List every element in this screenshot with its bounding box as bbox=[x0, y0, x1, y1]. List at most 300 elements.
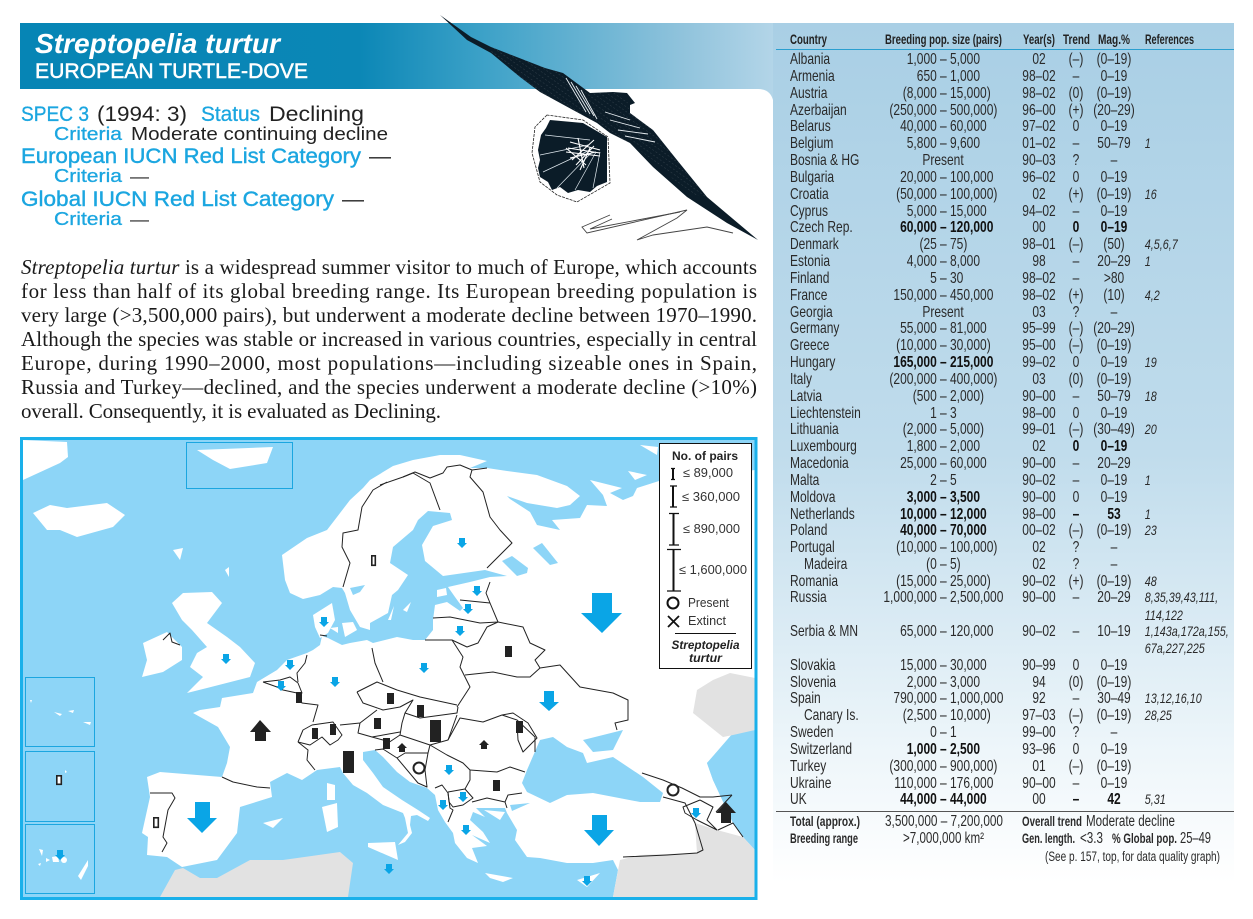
status block: (1994: 3) bbox=[97, 103, 187, 126]
panel: population table bbox=[773, 23, 1234, 883]
table column: breeding population size: 150,000 bbox=[893, 285, 937, 303]
table column: magnitude: 0–19 bbox=[1101, 487, 1128, 505]
table column: breeding population size: – 5 bbox=[940, 470, 957, 488]
status block: Criteria bbox=[54, 165, 123, 186]
table column: years: 96–00 bbox=[1022, 100, 1056, 118]
table column: breeding population size: (25 bbox=[919, 234, 937, 252]
table column: years: 02 bbox=[1032, 49, 1046, 67]
table column: breeding population size: – 3 bbox=[940, 403, 957, 421]
table column: breeding population size: 4,000 bbox=[907, 251, 937, 269]
status block: Criteria bbox=[54, 123, 123, 144]
table column: trend: – bbox=[1073, 789, 1080, 807]
table column: breeding population size bbox=[883, 49, 1004, 807]
table column: magnitude: 53 bbox=[1107, 504, 1121, 522]
table column: breeding population size: 25,000 bbox=[900, 453, 937, 471]
table column: magnitude: 50–79 bbox=[1097, 386, 1131, 404]
map: population bars, solid bbox=[296, 646, 523, 791]
table column: country: UK bbox=[790, 789, 807, 807]
body paragraph: Streptopelia turtur is a widespread summer visitor to much of Europe, which accounts bbox=[21, 255, 757, 279]
table column: breeding population size: – 120,000 bbox=[940, 217, 994, 235]
table column: breeding population size: 2 bbox=[930, 470, 937, 488]
table totals: Total (approx.) bbox=[790, 814, 860, 829]
map: seas and lakes bbox=[350, 543, 755, 850]
table column: trend: – bbox=[1073, 688, 1080, 706]
table column: country: Cyprus bbox=[790, 201, 828, 219]
table column: country: Latvia bbox=[790, 386, 822, 404]
table column: trend: 0 bbox=[1073, 352, 1080, 370]
table column: years: 92 bbox=[1032, 688, 1046, 706]
table column: breeding population size: 40,000 bbox=[900, 520, 937, 538]
table column: trend bbox=[1068, 49, 1084, 807]
table totals: Breeding range bbox=[790, 831, 858, 846]
table column: breeding population size: 44,000 bbox=[900, 789, 937, 807]
map legend: turtur bbox=[689, 651, 723, 665]
table column: magnitude: – bbox=[1111, 302, 1118, 320]
table column: trend: (–) bbox=[1069, 49, 1083, 67]
table column: years: 90–02 bbox=[1022, 571, 1056, 589]
table column: breeding population size: – 12,000 bbox=[940, 504, 987, 522]
table column: breeding population size: – 100,000) bbox=[940, 537, 997, 555]
table header: Year(s) bbox=[1023, 32, 1055, 47]
table column: breeding population size: (500 bbox=[913, 386, 937, 404]
table header bbox=[790, 32, 1194, 47]
table column: breeding population size: (10,000 bbox=[896, 537, 937, 555]
distribution map of Europe bbox=[21, 438, 756, 898]
table column: country: Turkey bbox=[790, 756, 826, 774]
table column: trend: 0 bbox=[1073, 655, 1080, 673]
table column: years: 98–02 bbox=[1022, 66, 1056, 84]
table column: references: 4,2 bbox=[1145, 288, 1160, 303]
table column: breeding population size: (300,000 bbox=[889, 756, 937, 774]
table column: years: 95–00 bbox=[1022, 335, 1056, 353]
table column: references: 114,122 bbox=[1145, 608, 1183, 623]
table column: trend: – bbox=[1073, 251, 1080, 269]
table column: trend: (0) bbox=[1069, 83, 1083, 101]
table totals: >7,000,000 km² bbox=[903, 830, 984, 847]
table column: breeding population size: 65,000 bbox=[900, 621, 937, 639]
table column: magnitude: (0–19) bbox=[1097, 520, 1131, 538]
table column: trend: (–) bbox=[1069, 520, 1083, 538]
status block: — bbox=[130, 210, 149, 229]
map: present-only circles bbox=[414, 762, 678, 796]
status block bbox=[21, 103, 391, 229]
table column: country: Georgia bbox=[790, 302, 833, 320]
table column: references: 19 bbox=[1145, 355, 1157, 370]
table column: references: 5,31 bbox=[1145, 792, 1166, 807]
table column: breeding population size: 60,000 bbox=[900, 217, 937, 235]
table column: breeding population size: – 3,500 bbox=[940, 487, 980, 505]
table column: trend: (–) bbox=[1069, 705, 1083, 723]
table column: breeding population size: – 500,000) bbox=[940, 100, 997, 118]
table column: trend: (–) bbox=[1069, 419, 1083, 437]
table column: country: Azerbaijan bbox=[790, 100, 847, 118]
table column: magnitude: (0–19) bbox=[1097, 49, 1131, 67]
body paragraph: Although the species was stable or increased in various countries, especially in central bbox=[21, 327, 757, 351]
status block: — bbox=[369, 146, 391, 168]
map: black increase arrows bbox=[250, 720, 736, 823]
table column: country: Albania bbox=[790, 49, 830, 67]
table column: breeding population size: (2,000 bbox=[903, 419, 937, 437]
table column: magnitude: 0–19 bbox=[1101, 403, 1128, 421]
table column: breeding population size: – 400,000) bbox=[940, 369, 997, 387]
table column: years: 95–99 bbox=[1022, 318, 1056, 336]
table column: years: 90–03 bbox=[1022, 150, 1056, 168]
table column: breeding population size: – 1,000 bbox=[940, 66, 980, 84]
table column: magnitude: (20–29) bbox=[1093, 318, 1135, 336]
table column: breeding population size: – 1,000,000 bbox=[940, 688, 1004, 706]
table column: magnitude: 0–19 bbox=[1101, 470, 1128, 488]
table column: magnitude: 30–49 bbox=[1097, 688, 1131, 706]
table column: magnitude: (0–19) bbox=[1097, 83, 1131, 101]
table column: breeding population size: – 215,000 bbox=[940, 352, 994, 370]
table column: breeding population size: 1,000,000 bbox=[883, 587, 937, 605]
table column: breeding population size: – 120,000 bbox=[940, 621, 994, 639]
table column: breeding population size: – 2,500,000 bbox=[940, 587, 1004, 605]
map: island insets bbox=[30, 700, 91, 880]
table column: years: 02 bbox=[1032, 436, 1046, 454]
table column: references: 8,35,39,43,111, bbox=[1145, 590, 1218, 605]
table column: trend: – bbox=[1073, 201, 1080, 219]
map legend: Streptopelia bbox=[672, 638, 740, 652]
table column: magnitude: (0–19) bbox=[1097, 184, 1131, 202]
table column: breeding population size: 15,000 bbox=[900, 655, 937, 673]
table column: country: Spain bbox=[790, 688, 821, 706]
table column: trend: – bbox=[1073, 453, 1080, 471]
map: country borders bbox=[150, 465, 743, 857]
map legend: ≤ 89,000 bbox=[683, 466, 733, 480]
map legend: Present bbox=[688, 596, 729, 610]
table column: trend: (0) bbox=[1069, 672, 1083, 690]
table column: breeding population size: – 15,000) bbox=[940, 83, 991, 101]
table column: breeding population size: – 2,500 bbox=[940, 739, 980, 757]
table column: breeding population size: – 75) bbox=[940, 234, 967, 252]
table column: breeding population size: 110,000 bbox=[894, 773, 937, 791]
table column: years: 02 bbox=[1032, 554, 1046, 572]
table column: years: 00 bbox=[1032, 217, 1046, 235]
table column: years: 01–02 bbox=[1022, 133, 1056, 151]
table column: breeding population size: – 81,000 bbox=[940, 318, 987, 336]
table column: country: Sweden bbox=[790, 722, 833, 740]
table column: breeding population size: (8,000 bbox=[903, 83, 937, 101]
table column: years: 98–01 bbox=[1022, 234, 1056, 252]
table column: country: Denmark bbox=[790, 234, 839, 252]
table column: trend: (–) bbox=[1069, 234, 1083, 252]
table column: breeding population size: 3,000 bbox=[907, 487, 937, 505]
table column: country: Bulgaria bbox=[790, 167, 834, 185]
table column: references: 13,12,16,10 bbox=[1145, 691, 1202, 706]
status block: — bbox=[342, 189, 364, 211]
table column: trend: ? bbox=[1073, 537, 1080, 555]
table column: breeding population size: – 44,000 bbox=[940, 789, 987, 807]
table column: years: 90–00 bbox=[1022, 587, 1056, 605]
table column: breeding population size: Present bbox=[922, 150, 964, 168]
map: inset boxes bbox=[26, 442, 292, 894]
table column: trend: (+) bbox=[1068, 571, 1084, 589]
table column: years: 94–02 bbox=[1022, 201, 1056, 219]
table column: breeding population size: 1,000 bbox=[907, 49, 937, 67]
table column: breeding population size: – 2,000 bbox=[940, 436, 980, 454]
table column: breeding population size: 20,000 bbox=[900, 167, 937, 185]
table column: breeding population size: – 2,000) bbox=[940, 386, 984, 404]
table column: years: 90–02 bbox=[1022, 470, 1056, 488]
table column: breeding population size: – 60,000 bbox=[940, 453, 987, 471]
table column: breeding population size: – 3,000 bbox=[940, 672, 980, 690]
table column: references: 20 bbox=[1144, 422, 1157, 437]
table header: Mag.% bbox=[1098, 32, 1130, 47]
table column: country: Macedonia bbox=[790, 453, 849, 471]
table column: trend: 0 bbox=[1073, 739, 1080, 757]
table column: trend: – bbox=[1073, 504, 1080, 522]
table column: breeding population size: 10,000 bbox=[900, 504, 937, 522]
table column: magnitude: 0–19 bbox=[1101, 217, 1128, 235]
table column: country bbox=[790, 49, 861, 807]
table column: references: 1 bbox=[1145, 136, 1151, 151]
table column: breeding population size: 40,000 bbox=[900, 116, 937, 134]
table column: trend: 0 bbox=[1073, 487, 1080, 505]
map legend: No. of pairs bbox=[672, 449, 738, 463]
table column: trend: (0) bbox=[1069, 369, 1083, 387]
table totals: % Global pop. bbox=[1112, 831, 1177, 846]
table column: trend: 0 bbox=[1073, 116, 1080, 134]
table column: trend: (–) bbox=[1069, 318, 1083, 336]
table column: years: 93–96 bbox=[1022, 739, 1056, 757]
table column: country: Netherlands bbox=[790, 504, 855, 522]
map: neighbouring non-European land bbox=[160, 673, 755, 897]
table column: trend: – bbox=[1073, 621, 1080, 639]
map: large blue decline arrows bbox=[187, 593, 622, 846]
table column: trend: (+) bbox=[1068, 184, 1084, 202]
illustration: turtle-dove in flight bbox=[440, 15, 758, 240]
table column: country: Croatia bbox=[790, 184, 829, 202]
table column: breeding population size: (200,000 bbox=[889, 369, 937, 387]
table column: magnitude bbox=[1093, 49, 1135, 807]
table column: breeding population size: – 8,000 bbox=[940, 251, 980, 269]
table column: magnitude: 42 bbox=[1107, 789, 1121, 807]
table column: country: Serbia & MN bbox=[790, 621, 858, 639]
table column: breeding population size: 1 bbox=[930, 403, 937, 421]
table column: breeding population size: 0 bbox=[930, 722, 937, 740]
table column: magnitude: 0–19 bbox=[1101, 352, 1128, 370]
table column: years: 02 bbox=[1032, 537, 1046, 555]
table column: country: France bbox=[790, 285, 828, 303]
table column: magnitude: (0–19) bbox=[1097, 369, 1131, 387]
table column: breeding population size: – 5,000 bbox=[940, 49, 980, 67]
table column: country: Madeira bbox=[804, 554, 848, 572]
table column: breeding population size: – 450,000 bbox=[940, 285, 994, 303]
table column: breeding population size: – 5,000) bbox=[940, 419, 984, 437]
table column: breeding population size: (2,500 bbox=[903, 705, 937, 723]
table column: trend: (+) bbox=[1068, 100, 1084, 118]
table column: country: Belgium bbox=[790, 133, 833, 151]
table column: magnitude: 50–79 bbox=[1097, 133, 1131, 151]
title: common name: EUROPEAN TURTLE-DOVE bbox=[35, 60, 308, 83]
table column: breeding population size: – 10,000) bbox=[940, 705, 991, 723]
table column: breeding population size: – 30,000 bbox=[940, 655, 987, 673]
table column: magnitude: 10–19 bbox=[1097, 621, 1131, 639]
table column: magnitude: 20–29 bbox=[1097, 453, 1131, 471]
table column: breeding population size: 1,800 bbox=[907, 436, 937, 454]
status block: Global IUCN Red List Category bbox=[21, 188, 335, 211]
table column: years: 94 bbox=[1032, 672, 1046, 690]
table column: country: Liechtenstein bbox=[790, 403, 861, 421]
status block: Status bbox=[201, 103, 260, 126]
table column: magnitude: 0–19 bbox=[1101, 66, 1128, 84]
table column: country: Estonia bbox=[790, 251, 830, 269]
table column: magnitude: (0–19) bbox=[1097, 705, 1131, 723]
title: scientific name: Streptopelia turtur bbox=[35, 28, 281, 59]
table column: country: Russia bbox=[790, 587, 827, 605]
table column: country: Slovakia bbox=[790, 655, 836, 673]
table column: references: 23 bbox=[1144, 523, 1157, 538]
body paragraph: for less than half of its global breeding range. Its European breeding population is bbox=[21, 279, 757, 303]
table column: breeding population size: – 70,000 bbox=[940, 520, 987, 538]
table column: years: 99–01 bbox=[1022, 419, 1056, 437]
table column: breeding population size: – 60,000 bbox=[940, 116, 987, 134]
table column: trend: (–) bbox=[1069, 756, 1083, 774]
table column: breeding population size: 165,000 bbox=[893, 352, 937, 370]
table column: breeding population size: – 900,000) bbox=[940, 756, 997, 774]
table column: country: Canary Is. bbox=[804, 705, 859, 723]
body paragraph: very large (>3,500,000 pairs), but underwent a moderate decline between 1970–1990. bbox=[21, 303, 757, 327]
status block: Criteria bbox=[54, 208, 123, 229]
table column: magnitude: 0–19 bbox=[1101, 773, 1128, 791]
table column: references: 1 bbox=[1145, 473, 1151, 488]
table column: magnitude: – bbox=[1111, 722, 1118, 740]
table column: breeding population size: – 100,000) bbox=[940, 184, 997, 202]
table totals: Overall trend bbox=[1022, 814, 1082, 829]
table column: years: 97–02 bbox=[1022, 116, 1056, 134]
table column: years: 97–03 bbox=[1022, 705, 1056, 723]
table column: magnitude: 0–19 bbox=[1101, 739, 1128, 757]
table totals: 25–49 bbox=[1180, 830, 1211, 847]
map legend: ≤ 1,600,000 bbox=[679, 563, 747, 577]
table column: years: 96–02 bbox=[1022, 167, 1056, 185]
table column: country: Malta bbox=[790, 470, 820, 488]
table column: breeding population size: 5,800 bbox=[907, 133, 937, 151]
table column: years: 90–00 bbox=[1022, 773, 1056, 791]
table column: country: Germany bbox=[790, 318, 839, 336]
table column: magnitude: (0–19) bbox=[1097, 756, 1131, 774]
table column: trend: – bbox=[1073, 587, 1080, 605]
table column: magnitude: 0–19 bbox=[1101, 655, 1128, 673]
table column: breeding population size: (10,000 bbox=[896, 335, 937, 353]
table column: trend: (+) bbox=[1068, 285, 1084, 303]
map legend: Extinct bbox=[688, 614, 727, 628]
map: land bbox=[23, 440, 755, 897]
table column: years: 03 bbox=[1032, 369, 1046, 387]
table column: magnitude: >80 bbox=[1104, 268, 1124, 286]
table column: country: Slovenia bbox=[790, 672, 836, 690]
table column: magnitude: 20–29 bbox=[1097, 251, 1131, 269]
table column: country: Bosnia & HG bbox=[790, 150, 859, 168]
table column: magnitude: 0–19 bbox=[1101, 201, 1128, 219]
table column: references: 1 bbox=[1145, 507, 1151, 522]
table header: Breeding pop. size (pairs) bbox=[885, 32, 1002, 47]
table column: breeding population size: – 1 bbox=[940, 722, 957, 740]
table column: country: Austria bbox=[790, 83, 828, 101]
table column: trend: ? bbox=[1073, 150, 1080, 168]
table column: country: Greece bbox=[790, 335, 830, 353]
table column: years: 98–00 bbox=[1022, 504, 1056, 522]
map: small blue decline arrows bbox=[55, 538, 701, 886]
table column: years: 90–00 bbox=[1022, 386, 1056, 404]
table column: breeding population size: 5,000 bbox=[907, 201, 937, 219]
table column: breeding population size: – 30 bbox=[940, 268, 964, 286]
table column: country: Portugal bbox=[790, 537, 835, 555]
status block: Declining bbox=[269, 103, 364, 126]
status block: SPEC 3 bbox=[21, 103, 89, 126]
map legend: ≤ 890,000 bbox=[683, 522, 740, 536]
table column: magnitude: (0–19) bbox=[1097, 571, 1131, 589]
map frame bbox=[22, 438, 756, 898]
table column: years: 98–00 bbox=[1022, 403, 1056, 421]
table column: country: Armenia bbox=[790, 66, 835, 84]
table column: years: 90–02 bbox=[1022, 621, 1056, 639]
table column: years: 00 bbox=[1032, 789, 1046, 807]
table column: years: 98–02 bbox=[1022, 268, 1056, 286]
table column: breeding population size: – 15,000 bbox=[940, 201, 987, 219]
table column: country: Finland bbox=[790, 268, 829, 286]
table column: years: 98 bbox=[1032, 251, 1046, 269]
table totals bbox=[790, 813, 1220, 864]
table column: years: 98–02 bbox=[1022, 285, 1056, 303]
header banner bbox=[20, 23, 773, 250]
status block: Moderate continuing decline bbox=[131, 123, 388, 144]
status block: European IUCN Red List Category bbox=[21, 145, 362, 168]
table column: references: 28,25 bbox=[1144, 708, 1172, 723]
table column: breeding population size: (250,000 bbox=[889, 100, 937, 118]
map legend: ≤ 360,000 bbox=[682, 490, 740, 504]
table column: trend: – bbox=[1073, 268, 1080, 286]
table column: breeding population size: (0 bbox=[926, 554, 937, 572]
table column: breeding population size: 790,000 bbox=[893, 688, 937, 706]
table column: trend: 0 bbox=[1073, 403, 1080, 421]
table column: magnitude: (0–19) bbox=[1097, 335, 1131, 353]
table column: years: 02 bbox=[1032, 184, 1046, 202]
table column: trend: – bbox=[1073, 66, 1080, 84]
table column: magnitude: 0–19 bbox=[1101, 167, 1128, 185]
table column: country: Ukraine bbox=[790, 773, 832, 791]
table column: breeding population size: – 5) bbox=[940, 554, 961, 572]
table column: country: Romania bbox=[790, 571, 838, 589]
table column: trend: (–) bbox=[1069, 335, 1083, 353]
table column: magnitude: (30–49) bbox=[1093, 419, 1135, 437]
table column: years: 98–02 bbox=[1022, 83, 1056, 101]
table column: years bbox=[1022, 49, 1056, 807]
table totals: 3,500,000 – 7,200,000 bbox=[885, 813, 1003, 830]
table column: breeding population size: (50,000 bbox=[896, 184, 937, 202]
table column: breeding population size: 1,000 bbox=[907, 739, 937, 757]
table column: country: Italy bbox=[790, 369, 812, 387]
table column: breeding population size: 650 bbox=[917, 66, 937, 84]
table column: country: Hungary bbox=[790, 352, 835, 370]
body paragraph: Europe, during 1990–2000, most populations—including sizeable ones in Spain, bbox=[21, 351, 757, 375]
table column: references bbox=[1144, 136, 1229, 807]
table column: trend: – bbox=[1073, 773, 1080, 791]
table column: years: 90–00 bbox=[1022, 487, 1056, 505]
table column: breeding population size: 55,000 bbox=[900, 318, 937, 336]
table column: references: 1,143a,172a,155, bbox=[1145, 624, 1229, 639]
table header: Trend bbox=[1063, 32, 1090, 47]
table column: country: Lithuania bbox=[790, 419, 839, 437]
table column: breeding population size: – 25,000) bbox=[940, 571, 991, 589]
table column: magnitude: 0–19 bbox=[1101, 116, 1128, 134]
table column: country: Belarus bbox=[790, 116, 831, 134]
table column: magnitude: (50) bbox=[1103, 234, 1125, 252]
map: population bars, open bbox=[57, 556, 375, 827]
table column: trend: 0 bbox=[1073, 436, 1080, 454]
table column: years: 99–02 bbox=[1022, 352, 1056, 370]
